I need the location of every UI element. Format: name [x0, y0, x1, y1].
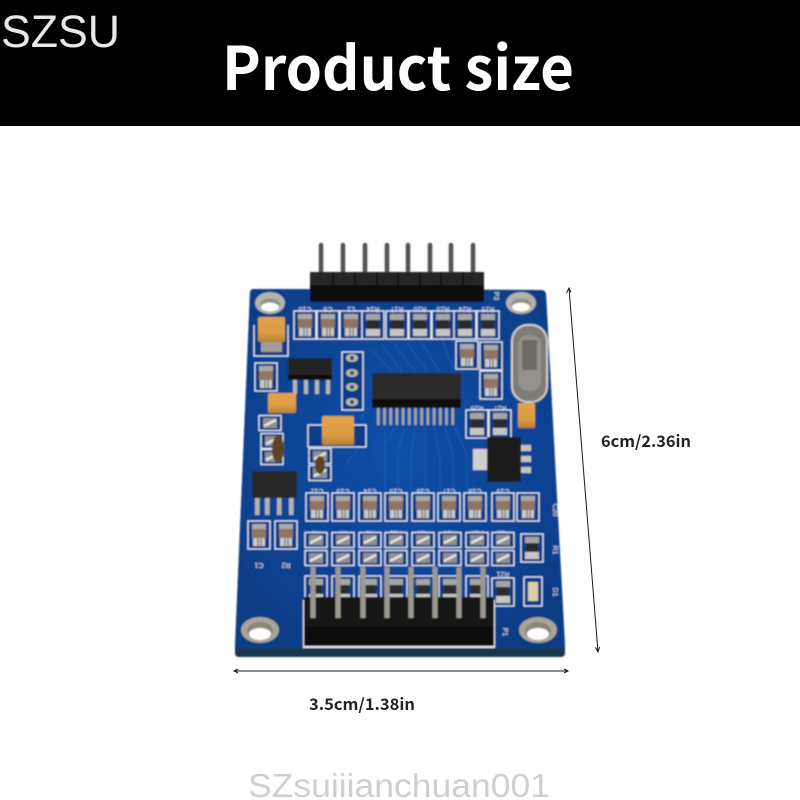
- silkscreen labels: R27: [493, 404, 506, 411]
- capacitor row: [306, 493, 539, 521]
- silkscreen labels: R16: [443, 529, 456, 536]
- silkscreen labels: R22: [496, 529, 509, 536]
- mounting holes: [241, 292, 557, 643]
- bottom pin header: [303, 567, 495, 648]
- right chip components: [456, 341, 511, 438]
- silkscreen labels: [254, 292, 558, 636]
- width dimension arrow: [234, 669, 568, 673]
- silkscreen labels: L1: [347, 305, 355, 312]
- silkscreen labels: R5: [311, 529, 320, 536]
- upper op-amp chip: [288, 358, 332, 394]
- silkscreen labels: R23: [436, 305, 449, 312]
- left tantalum capacitor: [254, 317, 288, 356]
- copper traces: [345, 335, 467, 490]
- left chip components: [248, 363, 331, 549]
- silkscreen labels: R9: [365, 529, 374, 536]
- circuit board photo: [235, 245, 565, 657]
- silkscreen labels: C12: [310, 487, 323, 494]
- silkscreen labels: R1: [551, 546, 558, 555]
- board outline: [235, 289, 565, 657]
- silkscreen labels: R2: [281, 561, 290, 568]
- silkscreen labels: C16: [416, 487, 429, 494]
- black header housing top: [310, 272, 484, 302]
- silkscreen labels: C17: [442, 487, 455, 494]
- silkscreen labels: R13: [416, 529, 429, 536]
- height label: 6cm/2.36in: [601, 428, 691, 452]
- small tantalum capacitor: [268, 393, 296, 413]
- lower op-amp chip: [252, 471, 297, 515]
- silkscreen labels: R7: [338, 529, 347, 536]
- silkscreen labels: R11: [390, 529, 402, 536]
- large tantalum capacitor: [308, 416, 366, 447]
- title: Product size: [222, 21, 574, 108]
- header band: [0, 0, 800, 126]
- silkscreen labels: R25: [481, 305, 494, 312]
- top pin header: [321, 245, 473, 276]
- silkscreen labels: R26: [470, 404, 483, 411]
- status LED: [524, 577, 542, 606]
- silkscreen labels: P3: [492, 292, 499, 300]
- right tantalum capacitor: [518, 403, 535, 428]
- silkscreen labels: R24: [458, 305, 471, 312]
- width label: 3.5cm/1.38in: [309, 691, 415, 715]
- silkscreen labels: C13: [336, 487, 349, 494]
- top component row: [294, 311, 499, 339]
- silkscreen labels: C19: [496, 487, 509, 494]
- main ADC chip: [372, 373, 461, 425]
- silkscreen labels: C1: [254, 561, 263, 568]
- silkscreen labels: R19: [470, 529, 483, 536]
- silkscreen labels: P1: [501, 628, 508, 636]
- brand mark: SZSU: [1, 6, 120, 57]
- resistor rows: [305, 532, 543, 606]
- silkscreen labels: C9: [323, 305, 332, 312]
- silkscreen labels: R21: [496, 570, 509, 577]
- height dimension arrow: [566, 288, 600, 652]
- silkscreen labels: C20: [551, 504, 558, 517]
- silkscreen labels: C18: [468, 487, 481, 494]
- silkscreen labels: D1: [551, 588, 558, 597]
- silkscreen labels: C10: [298, 305, 311, 312]
- silkscreen labels: R17: [390, 305, 403, 312]
- silkscreen labels: C14: [363, 487, 376, 494]
- voltage regulator: [473, 437, 531, 482]
- silkscreen labels: R20: [413, 305, 426, 312]
- silkscreen labels: R14: [366, 305, 379, 312]
- silkscreen labels: C15: [389, 487, 402, 494]
- four-pin pad strip: [342, 352, 363, 410]
- quartz crystal: [512, 325, 547, 402]
